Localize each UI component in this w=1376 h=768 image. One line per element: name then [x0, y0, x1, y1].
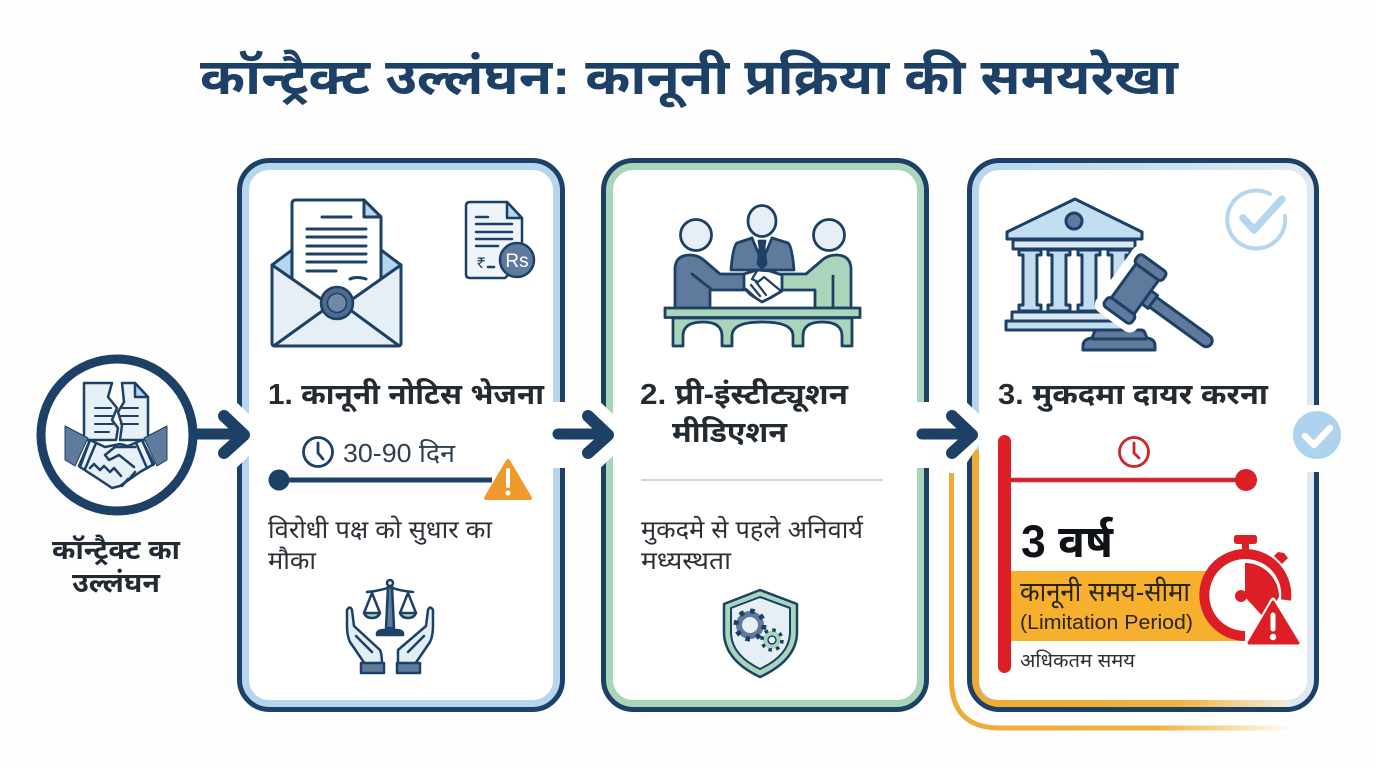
- panel: contract breach start node: [41, 359, 193, 598]
- red horizontal bar: [1008, 469, 1257, 491]
- icon: stopwatch with warning: [1204, 535, 1300, 645]
- divider: [641, 479, 883, 481]
- label: contract breach: उल्लंघन: [72, 568, 161, 598]
- title: कॉन्ट्रैक्ट उल्लंघन: कानूनी प्रक्रिया की समयरेखा: [200, 49, 1179, 109]
- body text: मुकदमे से पहले अनिवार्य: [641, 514, 864, 545]
- limitation label: [1020, 577, 1193, 634]
- body text: [268, 515, 493, 575]
- limitation timeline: [998, 435, 1257, 673]
- timeline: 30-90 days: [268, 438, 530, 498]
- panel: step 1 legal notice: [230, 160, 568, 710]
- body text: [641, 514, 864, 575]
- icon: gavel: [1083, 246, 1233, 374]
- body text: विरोधी पक्ष को सुधार का: [268, 515, 493, 545]
- arrow: step 2 to step 3: [922, 416, 972, 453]
- icon: document with rupee: [466, 202, 534, 278]
- arrow: breach to step 1: [196, 416, 244, 453]
- icon: document with rupee: Rs: [505, 251, 529, 272]
- heading: step 2: [640, 378, 849, 449]
- label: contract breach: कॉन्ट्रैक्ट का: [52, 534, 181, 566]
- heading: step 3: 3. मुकदमा दायर करना: [998, 379, 1268, 412]
- caption: अधिकतम समय: [1020, 650, 1136, 672]
- big number: 3 वर्ष: [1021, 516, 1114, 567]
- icon: envelope with letter: [272, 200, 401, 346]
- body text: मौका: [268, 546, 317, 575]
- arrow: step 1 to step 2: [558, 416, 608, 453]
- icon: mediation meeting: [665, 206, 860, 346]
- limitation label: (Limitation Period): [1020, 612, 1193, 634]
- card frame: [230, 160, 568, 710]
- icon: warning: [486, 461, 530, 498]
- heading: step 2: मीडिएशन: [672, 416, 788, 449]
- icon: broken contract handshake: [41, 359, 193, 511]
- icon: clock: [304, 438, 332, 466]
- card frame: [960, 160, 1324, 710]
- heading: step 1: 1. कानूनी नोटिस भेजना: [268, 377, 544, 412]
- duration label: 30-90 दिन: [343, 438, 456, 468]
- label: contract breach: [52, 534, 181, 598]
- card frame: [594, 160, 933, 710]
- panel: step 3 filing the suit: [952, 160, 1341, 728]
- red vertical bar: [998, 435, 1011, 673]
- outer orange accent line: [952, 473, 1295, 728]
- badge: check mark: [1293, 411, 1341, 459]
- icon: hands holding scales: [347, 580, 433, 673]
- limitation label: कानूनी समय-सीमा: [1020, 577, 1191, 609]
- icon: faded check mark: [1227, 191, 1285, 249]
- icon: shield with gears: [724, 590, 797, 677]
- body text: मध्यस्थता: [641, 547, 732, 575]
- orange band: [1011, 571, 1245, 641]
- icon: document with rupee: ₹: [476, 253, 486, 272]
- heading: step 2: 2. प्री-इंस्टीट्यूशन: [640, 378, 849, 412]
- panel: step 2 pre-institution mediation: [594, 160, 933, 710]
- icon: courthouse: [1006, 199, 1142, 330]
- timeline bar: [268, 470, 492, 490]
- icon: red clock: [1120, 438, 1148, 466]
